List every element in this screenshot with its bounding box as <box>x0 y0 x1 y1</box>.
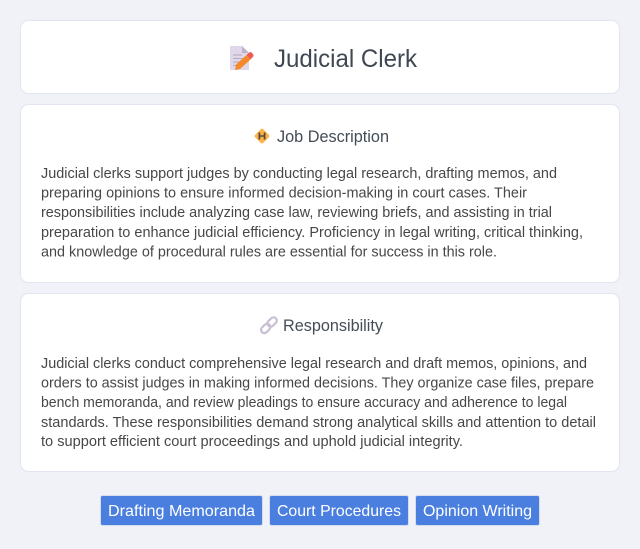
text block: responsibility: bench memoranda, and review pleadings to ensure accuracy and adherence to legal <box>41 394 567 411</box>
panel: responsibility <box>20 294 620 472</box>
icon: chain link <box>260 316 278 334</box>
text block: job description: and knowledge of procedural rules are essential for success in this role. <box>41 244 497 260</box>
text block: responsibility: orders to assist judges in making informed decisions. They organize case files, prepare <box>41 374 594 392</box>
tag: court procedures: Court Procedures <box>277 503 401 520</box>
tag: opinion writing <box>416 496 540 526</box>
text block: job description <box>41 165 583 260</box>
text block: responsibility: Judicial clerks conduct comprehensive legal research and draft memos, opinions, and <box>41 355 587 372</box>
panel: title card <box>20 20 620 94</box>
icon: orange diamond sign <box>254 128 270 144</box>
text block: responsibility <box>41 355 596 450</box>
text block: responsibility: to support efficient court proceedings and uphold judicial integrity. <box>41 433 463 450</box>
heading: responsibility: Responsibility <box>283 316 383 335</box>
panel: job description <box>20 104 620 282</box>
text block: responsibility: standards. These responsibilities demand strong analytical skills and attention to detail <box>41 414 596 431</box>
title: Judicial Clerk <box>274 45 417 73</box>
text block: job description: preparation to enhance judicial efficiency. Proficiency in legal writing, critical thinking, <box>41 224 583 241</box>
tag: opinion writing: Opinion Writing <box>423 503 532 520</box>
icon: document with pencil <box>230 46 253 70</box>
text block: job description: responsibilities include analyzing case law, reviewing briefs, and assisting in trial <box>41 204 552 221</box>
text block: job description: preparing opinions to ensure informed decision-making in court cases. Their <box>41 184 527 202</box>
heading: job description: Job Description <box>277 127 389 146</box>
tag: drafting memoranda <box>100 496 262 526</box>
text block: job description: Judicial clerks support judges by conducting legal research, drafting memos, and <box>41 165 557 182</box>
tag: court procedures <box>270 496 408 526</box>
tag: drafting memoranda: Drafting Memoranda <box>108 503 255 520</box>
